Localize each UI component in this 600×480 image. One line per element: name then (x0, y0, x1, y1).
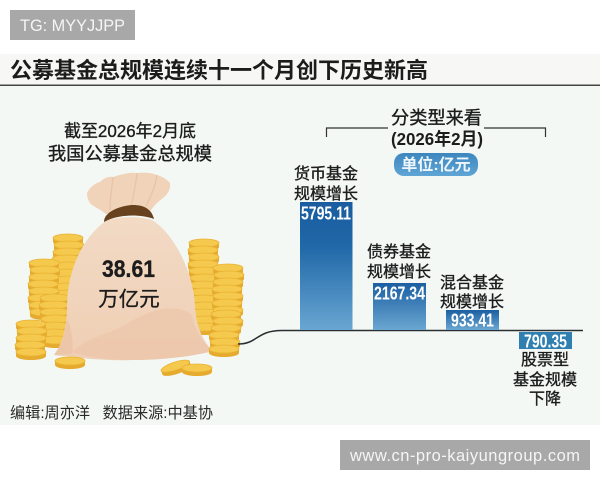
bar: equity funds (decline): 下降 (529, 390, 561, 408)
bracket header: by fund type: (2026年2月) (391, 129, 483, 149)
panel: infographic background (0, 54, 600, 425)
bar: bond funds: 债券基金 (367, 243, 431, 261)
bar: money market funds (294, 165, 358, 330)
title: 公募基金总规模连续十一个月创下历史新高 (10, 58, 428, 83)
connector line and baseline (238, 330, 583, 344)
icon: coin stacks in front of bag (15, 310, 243, 378)
bar: hybrid funds (440, 274, 504, 330)
watermark badge: top (10, 10, 135, 40)
bar: equity funds (decline): 基金规模 (513, 371, 577, 389)
icon: money bag (54, 173, 213, 360)
bar: hybrid funds: 933.41 (451, 310, 494, 330)
bar: bond funds (367, 243, 431, 330)
icon: coin stacks behind bag (28, 234, 244, 348)
big number: 38.61 (102, 256, 155, 283)
watermark badge: bottom (340, 440, 590, 470)
heading: total scale label: 截至2026年2月底 (64, 121, 196, 141)
bar: equity funds (decline): 股票型 (521, 351, 569, 369)
bracket header: by fund type (326, 108, 546, 149)
bar: equity funds (decline) (513, 330, 577, 408)
bar: bond funds: 规模增长 (367, 263, 431, 281)
bracket header: by fund type: 分类型来看 (391, 108, 482, 128)
watermark badge: top: TG: MYYJJPP (20, 17, 125, 35)
bar: money market funds: 5795.11 (301, 202, 351, 224)
heading: total scale label (48, 121, 212, 164)
bar: hybrid funds: 混合基金 (440, 274, 504, 292)
bar: hybrid funds: 规模增长 (440, 293, 504, 311)
bar: bond funds: 2167.34 (374, 282, 426, 304)
watermark badge: bottom: www.cn-pro-kaiyungroup.com (349, 447, 580, 465)
unit pill (394, 153, 478, 176)
bar: money market funds: 规模增长 (294, 185, 358, 203)
title (0, 54, 600, 86)
bar: equity funds (decline): 790.35 (524, 330, 567, 352)
bar: money market funds: 货币基金 (294, 165, 358, 183)
heading: total scale label: 我国公募基金总规模 (48, 144, 212, 164)
unit: trillion yuan: 万亿元 (98, 288, 160, 311)
footer credits: 编辑:周亦洋 数据来源:中基协 (10, 404, 213, 422)
unit pill: 单位:亿元 (401, 155, 471, 174)
